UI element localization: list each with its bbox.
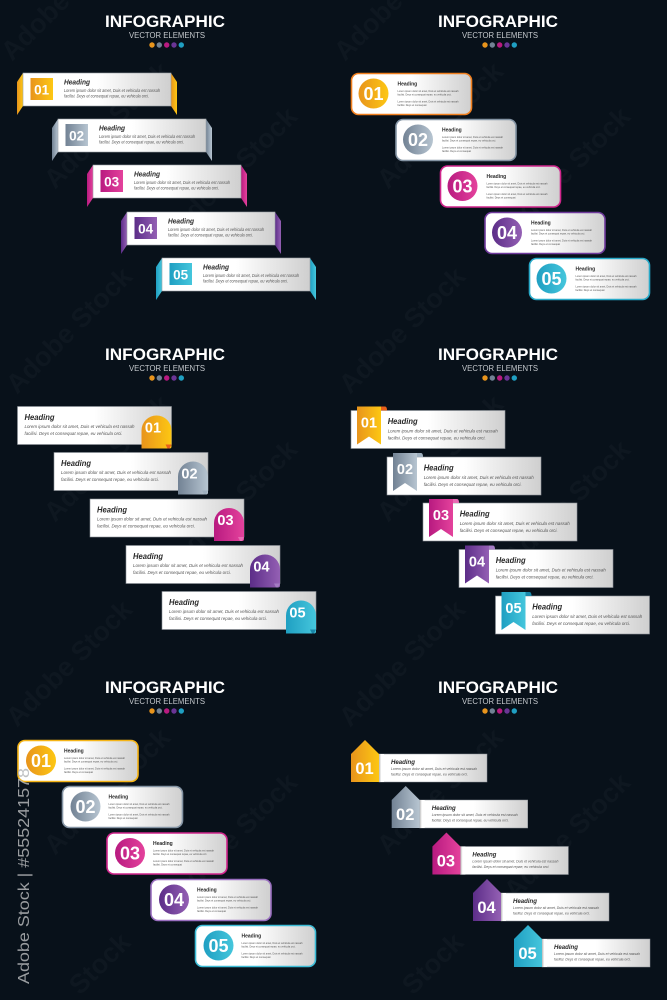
- body text: [432, 812, 518, 822]
- body text: facilisi. Deys et consequat repae, eu vehicula orci.: [64, 760, 118, 764]
- card 02: [62, 786, 182, 828]
- body text: [134, 180, 231, 191]
- heading: Heading: [61, 458, 92, 468]
- number badge 01: 01: [145, 420, 161, 436]
- body text: facilisi. Deys et consequat repae, eu vehicula orci.: [472, 864, 549, 869]
- text: Adobe Stock: [371, 389, 510, 527]
- card 04: [121, 212, 281, 254]
- title block: [438, 345, 558, 381]
- card 05: [196, 926, 316, 966]
- body text: [242, 941, 303, 959]
- card 02: [52, 119, 212, 161]
- card 02: [392, 786, 528, 828]
- body text: Lorem ipsum dolor sit amet, Duis et vehicula est nassah: [61, 470, 171, 476]
- body text: facilisi. Deys et consequat repae, eu vehicula orci.: [64, 94, 149, 99]
- heading: Heading: [64, 80, 91, 86]
- title block: VECTOR ELEMENTS: [462, 697, 538, 706]
- panel: folded ribbon cards: [17, 12, 316, 300]
- body text: Lorem ipsum dolor sit amet, Duis et vehicula est nassah: [442, 146, 503, 150]
- heading: Heading: [472, 852, 496, 858]
- body text: [153, 848, 214, 866]
- title block: INFOGRAPHIC: [105, 345, 225, 364]
- body text: [442, 135, 503, 153]
- body text: Lorem ipsum dolor sit amet, Duis et vehicula est nassah: [64, 756, 125, 760]
- body text: facilisi. Deys et consequat repae, eu vehicula orci.: [133, 570, 231, 576]
- heading: Heading: [442, 128, 462, 134]
- number badge 03: 03: [104, 174, 120, 190]
- body text: facilisi. Deys et consequat: [398, 103, 427, 107]
- title block: INFOGRAPHIC: [105, 12, 225, 31]
- number badge 02: 02: [396, 806, 414, 824]
- body text: facilisi. Deys et consequat repae, eu vehicula orci.: [242, 944, 296, 948]
- side credit text: Adobe Stock | #555241578: [16, 768, 33, 984]
- card 02: [396, 120, 516, 160]
- body text: facilisi. Deys et consequat repae, eu vehicula orci.: [97, 524, 195, 530]
- text: Adobe Stock: [498, 434, 637, 572]
- heading: Heading: [169, 597, 200, 607]
- body text: facilisi. Deys et consequat: [108, 816, 138, 820]
- heading: Heading: [99, 126, 126, 132]
- number badge 02: [393, 453, 423, 491]
- title block: VECTOR ELEMENTS: [462, 31, 538, 40]
- text: Adobe Stock: [498, 101, 637, 239]
- body text: [97, 516, 207, 530]
- number badge 02: 02: [69, 128, 84, 144]
- card 01: [17, 73, 177, 115]
- body text: Lorem ipsum dolor sit amet, Duis et vehicula est nassah: [133, 563, 243, 569]
- number badge 02: 02: [397, 462, 413, 478]
- body text: [203, 273, 300, 284]
- heading: Heading: [496, 555, 526, 565]
- body text: Lorem ipsum dolor sit amet, Duis et vehicula est nassah: [576, 284, 637, 288]
- number badge 04: 04: [469, 554, 485, 570]
- number badge 05: 05: [518, 945, 537, 963]
- heading: Heading: [134, 172, 161, 178]
- body text: facilisi. Deys et consequat: [153, 862, 182, 866]
- body text: Lorem ipsum dolor sit amet, Duis et vehicula est nassah: [531, 238, 592, 242]
- body text: facilisi. Deys et consequat repae, eu vehicula orci.: [108, 806, 163, 810]
- title block: VECTOR ELEMENTS: [129, 31, 205, 40]
- number badge 03: 03: [452, 176, 473, 196]
- number badge 04: 04: [253, 560, 270, 576]
- body text: Lorem ipsum dolor sit amet, Duis et vehicula est nassah: [398, 100, 459, 104]
- body text: facilisi. Deys et consequat repae, eu vehicula orci.: [398, 92, 452, 96]
- body text: [472, 858, 558, 869]
- text: Adobe Stock: [0, 594, 139, 732]
- number badge 04: 04: [497, 223, 517, 243]
- body text: [424, 475, 534, 488]
- card 02: [387, 453, 541, 495]
- number badge 05: 05: [289, 606, 306, 622]
- body text: [169, 609, 279, 622]
- body text: facilisi. Deys et consequat repae, eu vehicula orci.: [531, 232, 585, 236]
- body text: Lorem ipsum dolor sit amet, Duis et vehicula est nassah: [169, 609, 279, 615]
- title block: INFOGRAPHIC: [438, 345, 558, 364]
- body text: [531, 228, 592, 246]
- panel: bookmark ribbon cards: [351, 345, 650, 634]
- text: Adobe Stock: [333, 261, 472, 399]
- number badge 01: 01: [361, 416, 377, 432]
- card 05: [530, 258, 650, 300]
- body text: facilisi. Deys et consequat repae, eu vehicula orci.: [424, 482, 522, 488]
- number badge 05: 05: [541, 269, 562, 289]
- body text: facilisi. Deys et consequat repae, eu vehicula orci.: [134, 186, 219, 191]
- body text: facilisi. Deys et consequat repae, eu vehicula orci.: [532, 621, 630, 627]
- body text: Lorem ipsum dolor sit amet, Duis et vehicula est nassah: [153, 848, 214, 852]
- body text: Lorem ipsum dolor sit amet, Duis et vehicula est nassah: [496, 568, 606, 574]
- heading: Heading: [432, 805, 456, 812]
- body text: Lorem ipsum dolor sit amet, Duis et vehicula est nassah: [24, 424, 135, 430]
- body text: Lorem ipsum dolor sit amet, Duis et vehicula est nassah: [486, 182, 548, 186]
- body text: facilisi. Deys et consequat repae, eu vehicula orci.: [486, 185, 541, 189]
- heading: Heading: [486, 174, 506, 180]
- text: Stock: [63, 926, 137, 1000]
- card 01: [351, 740, 487, 782]
- body text: Lorem ipsum dolor sit amet, Duis et vehicula est nassah: [486, 192, 548, 196]
- body text: Lorem ipsum dolor sit amet, Duis et vehicula est nassah: [108, 812, 170, 816]
- number badge 04: 04: [138, 222, 154, 236]
- title block: [438, 12, 558, 48]
- heading: Heading: [64, 748, 84, 754]
- body text: [24, 424, 135, 437]
- heading: Heading: [24, 412, 55, 422]
- title block: VECTOR ELEMENTS: [129, 364, 205, 373]
- heading: Heading: [513, 898, 537, 905]
- text: Adobe Stock: [498, 767, 637, 905]
- body text: facilisi. Deys et consequat repae, eu vehicula orci.: [442, 138, 496, 142]
- number badge 05: [170, 263, 192, 285]
- heading: Heading: [424, 462, 454, 472]
- number badge 03: 03: [437, 852, 455, 870]
- number badge 01: 01: [363, 84, 384, 104]
- body text: Lorem ipsum dolor sit amet, Duis et vehicula est nassah: [424, 475, 534, 481]
- number badge 03: 03: [120, 844, 140, 864]
- number badge 01: [357, 406, 387, 444]
- body text: Lorem ipsum dolor sit amet, Duis et vehicula est nassah: [97, 516, 207, 522]
- heading: Heading: [133, 551, 164, 561]
- card 01: [18, 740, 138, 782]
- body text: facilisi. Deys et consequat repae, eu vehicula orci.: [61, 477, 159, 483]
- body text: facilisi. Deys et consequat repae, eu vehicula orci.: [496, 574, 594, 580]
- body text: Lorem ipsum dolor sit amet, Duis et vehicula est nassah: [531, 228, 592, 232]
- card 01: [352, 74, 472, 114]
- body text: [133, 563, 243, 576]
- card 05: [156, 258, 316, 300]
- number badge 02: [178, 462, 208, 494]
- body text: Lorem ipsum dolor sit amet, Duis et vehicula est nassah: [388, 428, 498, 434]
- number badge 01: [142, 416, 172, 448]
- body text: Lorem ipsum dolor sit amet, Duis et vehicula est nassah: [576, 274, 637, 278]
- text: Adobe Stock: [165, 434, 304, 572]
- body text: facilisi. Deys et consequat: [197, 909, 226, 913]
- heading: Heading: [153, 841, 173, 847]
- card 04: [126, 546, 280, 588]
- body text: Lorem ipsum dolor sit amet, Duis et vehicula est nassah: [197, 895, 258, 899]
- number badge 03: [429, 499, 459, 537]
- text: Adobe Stock: [38, 722, 177, 860]
- panel: house tab cards: [351, 678, 650, 967]
- body text: Lorem ipsum dolor sit amet, Duis et vehicula est nassah: [472, 858, 558, 864]
- card 03: [432, 832, 568, 874]
- heading: Heading: [108, 794, 128, 800]
- card 04: [485, 212, 605, 254]
- body text: facilisi. Deys et consequat repae, eu vehicula orci.: [576, 278, 630, 282]
- number badge 02: 02: [75, 797, 96, 817]
- body text: [108, 802, 170, 820]
- number badge 04: 04: [477, 899, 496, 917]
- card 05: [514, 925, 650, 967]
- text: Adobe Stock: [0, 261, 139, 399]
- number badge 05: [502, 592, 532, 630]
- card 03: [440, 166, 560, 207]
- title block: INFOGRAPHIC: [438, 12, 558, 31]
- number badge 02: 02: [408, 130, 428, 150]
- body text: Lorem ipsum dolor sit amet, Duis et vehicula est nassah: [442, 135, 503, 139]
- body text: facilisi. Deys et consequat: [576, 288, 605, 292]
- text: Adobe Stock: [165, 767, 304, 905]
- card 05: [496, 592, 650, 634]
- card 03: [90, 499, 244, 541]
- number badge 04: [250, 554, 280, 588]
- text: Adobe Stock: [371, 722, 510, 860]
- body text: facilisi. Deys et consequat: [242, 955, 271, 959]
- card 04: [473, 879, 609, 921]
- body text: facilisi. Deys et consequat repae, eu vehicula orci.: [554, 956, 631, 962]
- card 03: [423, 499, 577, 541]
- number badge 04: [465, 546, 495, 584]
- body text: Lorem ipsum dolor sit amet, Duis et vehicula est nassah: [432, 812, 518, 817]
- number badge 01: 01: [31, 751, 51, 771]
- heading: Heading: [398, 82, 417, 88]
- title block: INFOGRAPHIC: [105, 678, 225, 697]
- card 03: [87, 165, 247, 207]
- body text: [197, 895, 258, 913]
- text: Adobe Stock: [165, 101, 304, 239]
- body text: [391, 766, 477, 776]
- heading: Heading: [391, 759, 415, 766]
- body text: Lorem ipsum dolor sit amet, Duis et vehicula est nassah: [64, 88, 161, 93]
- heading: Heading: [97, 504, 128, 514]
- body text: Lorem ipsum dolor sit amet, Duis et vehicula est nassah: [554, 951, 640, 956]
- number badge 03: [100, 170, 123, 192]
- body text: facilisi. Deys et consequat repae, eu vehicula orci.: [168, 233, 253, 238]
- card 03: [107, 833, 227, 874]
- text: Adobe Stock: [38, 389, 177, 527]
- number badge 01: 01: [34, 82, 50, 98]
- heading: Heading: [242, 934, 261, 940]
- number badge 02: [66, 124, 88, 146]
- body text: facilisi. Deys et consequat: [486, 196, 516, 200]
- body text: [532, 614, 642, 627]
- heading: Heading: [388, 416, 418, 426]
- number badge 05: 05: [173, 268, 189, 282]
- body text: facilisi. Deys et consequat repae, eu vehicula orci.: [99, 140, 184, 145]
- body text: Lorem ipsum dolor sit amet, Duis et vehicula est nassah: [460, 521, 570, 527]
- body text: [64, 88, 161, 99]
- body text: facilisi. Deys et consequat repae, eu vehicula orci.: [513, 910, 590, 916]
- text: Adobe Stock: [38, 56, 177, 194]
- panel: rounded outline cards top: [352, 12, 650, 300]
- text: Adobe Stock: [333, 594, 472, 732]
- body text: [99, 134, 196, 145]
- card 05: [162, 592, 316, 634]
- text: Stock: [396, 926, 470, 1000]
- body text: facilisi. Deys et consequat: [531, 242, 560, 246]
- body text: [576, 274, 637, 292]
- heading: Heading: [168, 218, 195, 226]
- body text: Lorem ipsum dolor sit amet, Duis et vehicula est nassah: [168, 227, 265, 232]
- heading: Heading: [532, 602, 563, 612]
- number badge 05: 05: [505, 601, 522, 617]
- number badge 03: [214, 508, 244, 541]
- title block: [438, 678, 558, 714]
- body text: Lorem ipsum dolor sit amet, Duis et vehicula est nassah: [532, 614, 642, 620]
- panel: rounded outline cards bottom: [18, 678, 316, 966]
- body text: Lorem ipsum dolor sit amet, Duis et vehicula est nassah: [197, 906, 258, 910]
- text: Adobe Stock: [371, 56, 510, 194]
- body text: facilisi. Deys et consequat repae, eu vehicula orci.: [24, 431, 122, 437]
- body text: [460, 521, 570, 534]
- body text: [486, 182, 548, 200]
- number badge 02: 02: [181, 466, 198, 482]
- body text: facilisi. Deys et consequat repae, eu vehicula orci.: [203, 279, 288, 284]
- card 02: [54, 452, 208, 494]
- body text: Lorem ipsum dolor sit amet, Duis et vehicula est nassah: [153, 859, 214, 863]
- body text: Lorem ipsum dolor sit amet, Duis et vehicula est nassah: [64, 766, 125, 770]
- body text: Lorem ipsum dolor sit amet, Duis et vehicula est nassah: [242, 952, 303, 956]
- heading: Heading: [203, 264, 230, 272]
- heading: Heading: [576, 266, 595, 272]
- number badge 01: [30, 78, 53, 100]
- body text: [388, 428, 498, 442]
- body text: [554, 951, 640, 962]
- body text: facilisi. Deys et consequat repae, eu vehicula orci.: [153, 852, 207, 856]
- body text: [513, 905, 599, 916]
- body text: facilisi. Deys et consequat: [442, 149, 471, 153]
- title block: [105, 12, 225, 48]
- number badge 01: 01: [355, 760, 374, 778]
- body text: Lorem ipsum dolor sit amet, Duis et vehicula est nassah: [203, 273, 300, 278]
- body text: Lorem ipsum dolor sit amet, Duis et vehicula est nassah: [108, 802, 170, 806]
- body text: [61, 470, 171, 483]
- body text: [168, 227, 265, 238]
- number badge 04: [134, 217, 157, 239]
- heading: Heading: [531, 220, 551, 226]
- title block: VECTOR ELEMENTS: [129, 697, 205, 706]
- body text: [398, 89, 459, 107]
- number badge 04: 04: [164, 890, 184, 910]
- heading: Heading: [197, 888, 217, 894]
- card 01: [18, 406, 172, 448]
- body text: Lorem ipsum dolor sit amet, Duis et vehicula est nassah: [391, 766, 477, 771]
- body text: [64, 756, 125, 774]
- title block: [105, 678, 225, 714]
- card 01: [351, 406, 505, 448]
- heading: Heading: [554, 944, 578, 951]
- body text: facilisi. Deys et consequat repae, eu vehicula orci.: [432, 818, 509, 822]
- body text: facilisi. Deys et consequat repae, eu vehicula orci.: [391, 772, 468, 776]
- body text: facilisi. Deys et consequat repae, eu vehicula orci.: [169, 616, 267, 622]
- card 04: [151, 880, 271, 920]
- body text: facilisi. Deys et consequat repae, eu vehicula orci.: [460, 528, 558, 534]
- body text: Lorem ipsum dolor sit amet, Duis et vehicula est nassah: [242, 941, 303, 945]
- number badge 05: 05: [208, 936, 229, 956]
- number badge 03: 03: [433, 508, 449, 524]
- title block: VECTOR ELEMENTS: [462, 364, 538, 373]
- number badge 03: 03: [217, 513, 234, 529]
- body text: Lorem ipsum dolor sit amet, Duis et vehicula est nassah: [99, 134, 196, 139]
- title block: [105, 345, 225, 381]
- card 04: [459, 546, 613, 588]
- body text: facilisi. Deys et consequat repae, eu vehicula orci.: [197, 898, 251, 902]
- panel: arch tab cards: [18, 345, 316, 634]
- number badge 05: [286, 600, 316, 634]
- title block: INFOGRAPHIC: [438, 678, 558, 697]
- body text: facilisi. Deys et consequat repae, eu vehicula orci.: [388, 436, 486, 442]
- body text: [496, 568, 606, 580]
- body text: Lorem ipsum dolor sit amet, Duis et vehicula est nassah: [398, 89, 459, 93]
- body text: facilisi. Deys et consequat: [64, 770, 93, 774]
- heading: Heading: [460, 508, 490, 518]
- body text: Lorem ipsum dolor sit amet, Duis et vehicula est nassah: [513, 905, 599, 910]
- body text: Lorem ipsum dolor sit amet, Duis et vehicula est nassah: [134, 180, 231, 185]
